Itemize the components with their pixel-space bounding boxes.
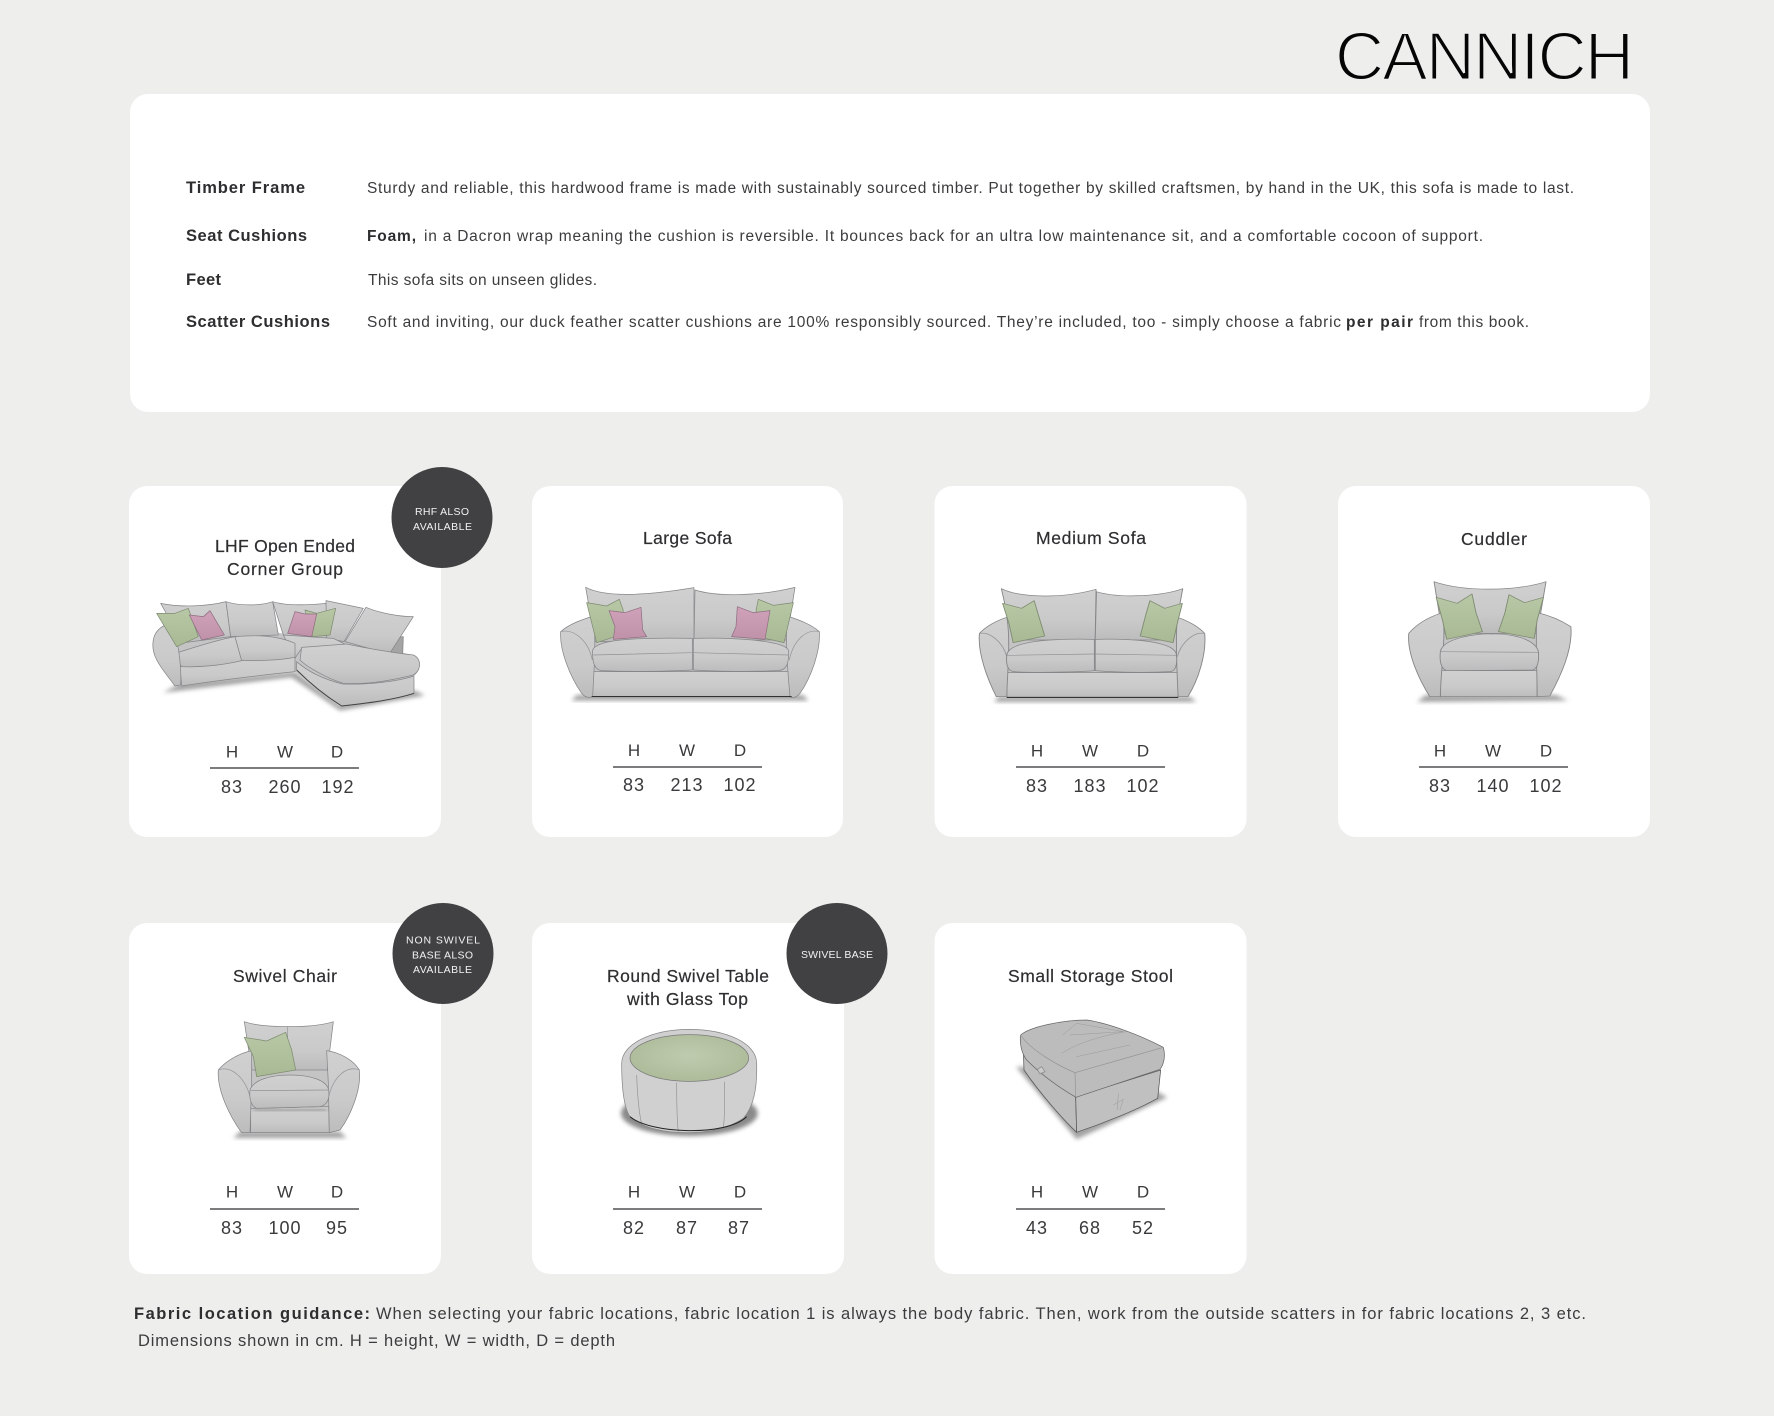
heading <box>607 966 769 1009</box>
badge: swivel base <box>786 903 888 1004</box>
heading: Swivel Chair <box>233 966 337 986</box>
dimensions table: 87 <box>676 1218 698 1238</box>
badge: non swivel base also available <box>392 903 494 1004</box>
card: round swivel table <box>532 903 888 1274</box>
badge: swivel base: SWIVEL BASE <box>801 949 873 961</box>
illustration: cuddler <box>1409 582 1571 702</box>
dimensions table: 87 <box>728 1218 750 1238</box>
row: seat cushions: Foam, <box>367 228 416 245</box>
illustration: storage stool <box>1016 1020 1167 1139</box>
row: seat cushions: Seat Cushions <box>186 227 307 245</box>
dimensions table: 192 <box>321 777 355 797</box>
illustration: medium sofa <box>979 589 1205 702</box>
dimensions table: 140 <box>1476 776 1510 796</box>
row: feet: Feet <box>186 271 222 289</box>
dimensions table: H <box>1434 742 1446 760</box>
card: large sofa <box>532 486 843 837</box>
heading: Large Sofa <box>643 528 732 548</box>
dimensions table: 102 <box>723 775 757 795</box>
row: scatter cushions: per pair <box>1346 314 1413 331</box>
dimensions table <box>1419 742 1568 796</box>
dimensions table: H <box>1031 1182 1043 1202</box>
dimensions table: D <box>1540 742 1552 760</box>
dimensions table: D <box>331 742 343 762</box>
heading: Round Swivel Table <box>607 966 769 986</box>
row: seat cushions: in a Dacron wrap meaning the cushion is reversible. It bounces back for an ultra low maintenance sit, and a comfortable cocoon of support. <box>424 228 1483 245</box>
title: CANNICH <box>1335 18 1634 94</box>
dimensions table <box>613 741 762 795</box>
dimensions table: 82 <box>623 1218 645 1238</box>
heading: Corner Group <box>227 559 343 579</box>
card: LHF open ended corner group <box>129 467 492 837</box>
footer note <box>134 1305 1586 1350</box>
heading: with Glass Top <box>626 989 748 1009</box>
dimensions table: 68 <box>1079 1218 1101 1238</box>
dimensions table: 83 <box>1026 776 1048 796</box>
badge: non swivel base also available: AVAILABLE <box>413 964 472 976</box>
illustration: round table <box>621 1029 758 1136</box>
card: cuddler <box>1338 486 1650 837</box>
dimensions table: H <box>226 742 238 762</box>
dimensions table: W <box>679 741 695 760</box>
panel: specification <box>130 94 1650 412</box>
dimensions table: 260 <box>268 777 302 797</box>
dimensions table <box>613 1182 762 1238</box>
dimensions table: W <box>1485 742 1501 760</box>
footer note: Dimensions shown in cm. H = height, W = width, D = depth <box>138 1332 615 1350</box>
footer note: Fabric location guidance: <box>134 1305 370 1323</box>
row: feet: This sofa sits on unseen glides. <box>368 272 597 289</box>
badge: RHF also available: RHF ALSO <box>415 506 469 518</box>
dimensions table <box>210 1182 359 1238</box>
heading: Medium Sofa <box>1036 528 1146 548</box>
card: swivel chair <box>129 903 494 1274</box>
dimensions table: H <box>628 741 640 760</box>
card: medium sofa <box>934 486 1246 837</box>
dimensions table <box>210 742 359 797</box>
dimensions table: 83 <box>1429 776 1451 796</box>
dimensions table: H <box>628 1182 640 1202</box>
illustration: corner sofa <box>153 601 425 711</box>
dimensions table: 83 <box>221 1218 243 1238</box>
dimensions table: 43 <box>1026 1218 1048 1238</box>
row: scatter cushions: from this book. <box>1419 314 1529 331</box>
dimensions table: 52 <box>1132 1218 1154 1238</box>
dimensions table: H <box>226 1182 238 1202</box>
footer note: When selecting your fabric locations, fabric location 1 is always the body fabric. Then, work from the outside scatters in for fabric locations 2, 3 etc. <box>376 1305 1586 1323</box>
dimensions table: 95 <box>326 1218 348 1238</box>
dimensions table: W <box>277 742 293 762</box>
dimensions table: W <box>1082 742 1098 760</box>
heading: LHF Open Ended <box>215 536 355 556</box>
heading: Cuddler <box>1461 529 1527 549</box>
row: scatter cushions: Scatter Cushions <box>186 313 330 331</box>
dimensions table: W <box>679 1182 695 1202</box>
dimensions table: D <box>1137 742 1149 760</box>
dimensions table: D <box>734 1182 746 1202</box>
badge: RHF also available <box>392 467 492 568</box>
heading <box>215 536 355 579</box>
dimensions table: 102 <box>1126 776 1160 796</box>
badge: non swivel base also available: NON SWIVEL <box>406 934 480 946</box>
card: small storage stool <box>934 923 1246 1274</box>
badge: RHF also available: AVAILABLE <box>413 521 472 533</box>
dimensions table: D <box>1137 1182 1149 1202</box>
heading: Small Storage Stool <box>1008 966 1173 986</box>
dimensions table: 100 <box>268 1218 302 1238</box>
dimensions table: W <box>1082 1182 1098 1202</box>
dimensions table: 213 <box>670 775 704 795</box>
dimensions table <box>1016 1182 1165 1238</box>
row: scatter cushions <box>186 313 1529 331</box>
illustration: swivel chair <box>218 1022 360 1138</box>
dimensions table: H <box>1031 742 1043 760</box>
dimensions table: D <box>734 741 746 760</box>
dimensions table: D <box>331 1182 343 1202</box>
dimensions table: 183 <box>1073 776 1107 796</box>
dimensions table: 83 <box>623 775 645 795</box>
dimensions table <box>1016 742 1165 796</box>
row: scatter cushions: Soft and inviting, our duck feather scatter cushions are 100% responsibly sourced. They’re included, too - simply choose a fabric <box>367 314 1341 331</box>
row: timber frame: Timber Frame <box>186 179 305 197</box>
dimensions table: 102 <box>1529 776 1563 796</box>
illustration: large sofa <box>561 587 819 701</box>
dimensions table: 83 <box>221 777 243 797</box>
badge: non swivel base also available: BASE ALSO <box>412 950 473 962</box>
row: feet <box>186 271 597 289</box>
dimensions table: W <box>277 1182 293 1202</box>
row: timber frame: Sturdy and reliable, this hardwood frame is made with sustainably sourced timber. Put together by skilled craftsmen, by hand in the UK, this sofa is made to last. <box>367 180 1574 197</box>
